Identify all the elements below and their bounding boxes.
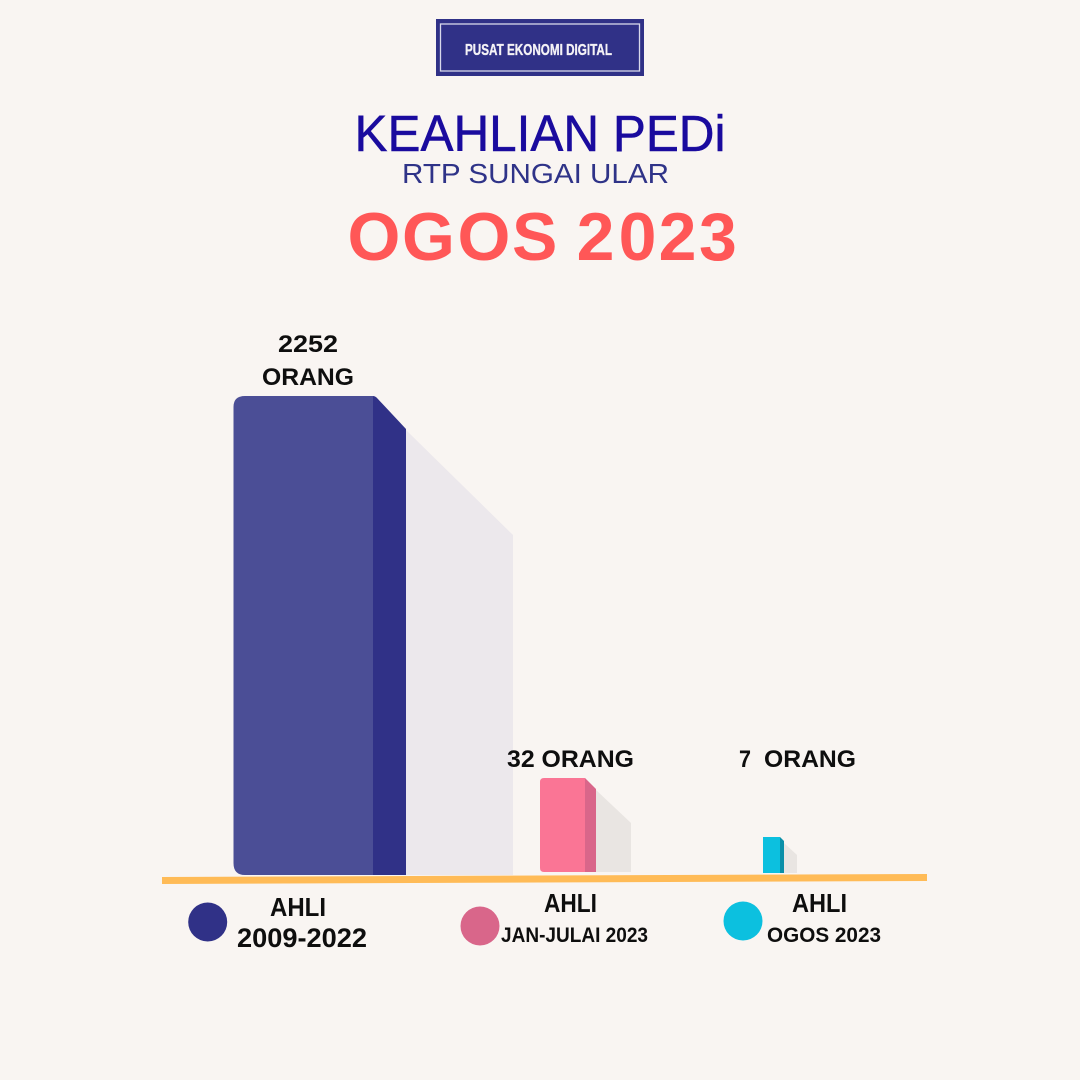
legend: 2009-2022: AHLI bbox=[270, 892, 326, 922]
value label: 7 orang: ORANG bbox=[764, 746, 856, 773]
value label: 32 orang: 32 ORANG bbox=[507, 746, 634, 773]
bar: Ogos 2023 bbox=[763, 837, 797, 873]
bar: Jan-Julai 2023 bbox=[540, 778, 631, 872]
bar: 2009-2022 bbox=[234, 396, 513, 875]
legend: 2009-2022: 2009-2022 bbox=[237, 923, 367, 953]
legend: Jan-Julai 2023: AHLI bbox=[544, 888, 597, 918]
value label: 2252 orang: ORANG bbox=[262, 364, 354, 391]
bar chart bbox=[162, 331, 927, 884]
baseline axis bbox=[162, 874, 927, 884]
date heading: OGOS 2023 bbox=[348, 199, 737, 275]
legend: Jan-Julai 2023: JAN-JULAI 2023 bbox=[501, 924, 648, 947]
legend: Ogos 2023 bbox=[724, 888, 881, 947]
value label: 7 orang: 7 bbox=[739, 746, 751, 773]
legend: Ogos 2023: AHLI bbox=[792, 888, 847, 918]
legend: Jan-Julai 2023 bbox=[460, 888, 648, 947]
legend: Ogos 2023: OGOS 2023 bbox=[767, 924, 881, 947]
value label: 2252 orang: 2252 bbox=[278, 331, 338, 358]
subtitle: RTP SUNGAI ULAR bbox=[402, 158, 669, 189]
legend: 2009-2022 bbox=[188, 892, 367, 953]
banner: Pusat Ekonomi Digital bbox=[436, 19, 644, 76]
title: KEAHLIAN PEDi bbox=[354, 105, 726, 162]
banner: Pusat Ekonomi Digital: PUSAT EKONOMI DIGITAL bbox=[465, 42, 612, 59]
value label: 2252 orang bbox=[262, 331, 354, 391]
